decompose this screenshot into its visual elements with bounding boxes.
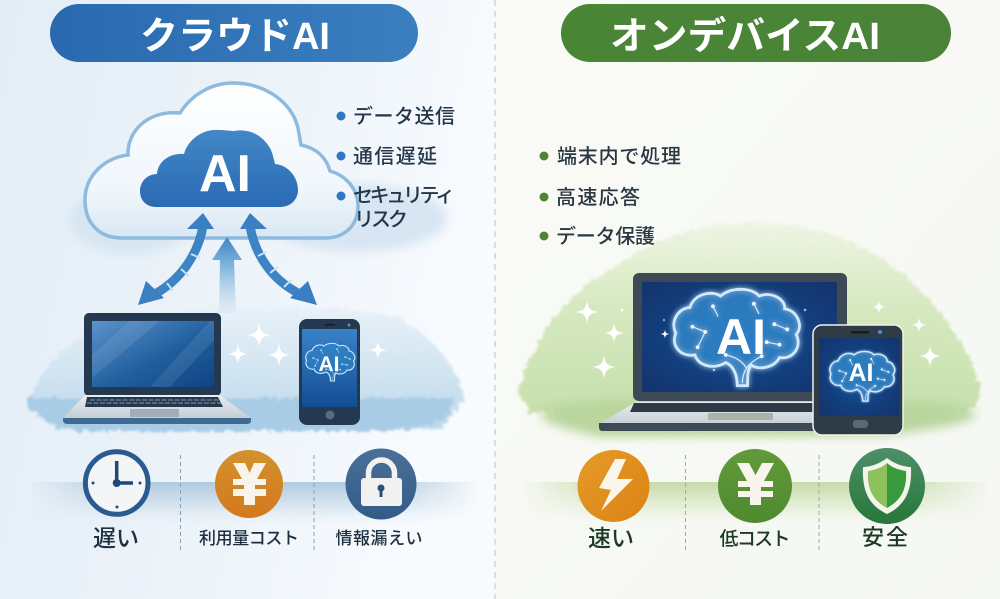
panel divider [494, 0, 496, 599]
bullet list: on-device AI traits: 端末内で処理 [557, 145, 681, 168]
icon: sparkles [576, 300, 941, 379]
title: cloud AI: クラウドAI [140, 16, 330, 58]
background wash behind devices [27, 305, 465, 431]
bullet list: cloud AI traits: データ送信 [353, 104, 455, 128]
illustration: tablet with AI brain: AI [848, 359, 874, 387]
label: information leak: 情報漏えい [336, 529, 422, 548]
label: slow: 遅い [93, 525, 139, 551]
bullet list: cloud AI traits [336, 104, 455, 231]
arrow: left double-headed data arrow [138, 213, 214, 305]
label: usage cost: 利用量コスト [199, 529, 299, 548]
bullet list: on-device AI traits: 高速応答 [556, 185, 640, 209]
panel: cloud AI background [0, 0, 495, 599]
title: cloud AI [50, 4, 418, 62]
title: on-device AI [561, 4, 951, 62]
bullet list: on-device AI traits [540, 145, 681, 248]
divider 1 [180, 455, 182, 552]
bullet list: cloud AI traits: リスク [354, 208, 408, 231]
panel: cloud AI [27, 4, 480, 552]
icon: shield [849, 448, 925, 524]
divider 2 [818, 455, 820, 552]
panel: on-device AI background [495, 0, 1000, 599]
arrow: right double-headed data arrow [240, 213, 317, 305]
illustration: laptop [63, 313, 251, 424]
label: low cost: 低コスト [720, 528, 790, 550]
bullet list: cloud AI traits: セキュリティ [353, 185, 455, 207]
icon: yen coin [718, 449, 792, 523]
illustration: cloud with AI: AI [199, 145, 251, 203]
icon: padlock [346, 448, 416, 520]
panel: on-device AI [518, 4, 990, 552]
illustration: smartphone with AI brain [299, 319, 360, 425]
illustration: laptop with AI brain: AI [716, 309, 766, 365]
label: fast: 速い [588, 525, 634, 551]
illustration: laptop with AI brain [599, 273, 847, 431]
illustration: cloud with AI [85, 83, 358, 238]
background wash behind devices [518, 222, 982, 437]
ground band [43, 482, 470, 518]
ground band [530, 482, 980, 516]
icon: sparkles [228, 323, 387, 366]
divider 1 [684, 455, 686, 552]
illustration: smartphone with AI brain: AI [318, 353, 340, 376]
icon: yen coin [215, 450, 283, 518]
background mist behind the cloud [68, 184, 447, 254]
bullet list: on-device AI traits: データ保護 [556, 224, 655, 248]
bullet list: cloud AI traits: 通信遅延 [353, 145, 437, 168]
title: on-device AI: オンデバイスAI [610, 15, 880, 58]
divider 2 [313, 455, 315, 552]
icon: lightning bolt [578, 450, 650, 522]
illustration: tablet with AI brain [813, 325, 903, 435]
label: safe: 安全 [862, 525, 908, 550]
arrow: vertical upload arrow [212, 237, 242, 313]
icon: clock [85, 452, 148, 514]
